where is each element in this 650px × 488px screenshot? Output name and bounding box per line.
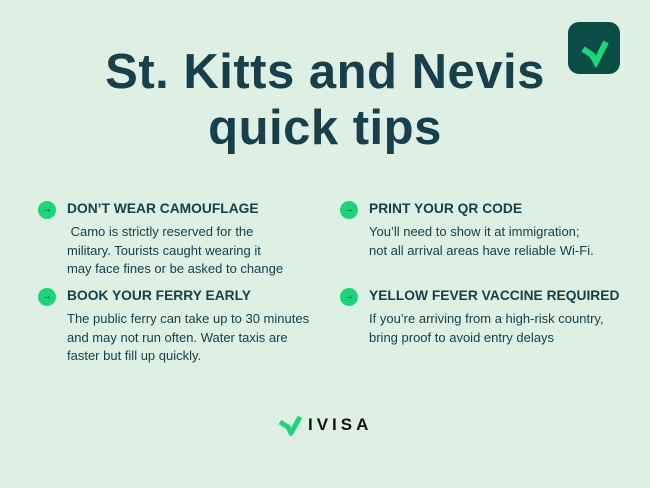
tip: yellow fever xyxy=(340,288,619,344)
tip: camouflage: → xyxy=(42,204,52,215)
tip: QR code xyxy=(340,201,594,258)
footer logo xyxy=(278,415,372,436)
tip: camouflage: DON’T WEAR CAMOUFLAGE xyxy=(67,201,259,216)
icon: logo badge xyxy=(568,22,620,74)
tip: ferry xyxy=(38,288,309,363)
title xyxy=(105,45,545,155)
tip: ferry: BOOK YOUR FERRY EARLY xyxy=(67,288,251,303)
tip: ferry: → xyxy=(42,291,52,302)
tip: camouflage: Camo is strictly reserved for the military. Tourists caught wearing it may face fines or be asked to change xyxy=(67,224,283,276)
title: quick tips xyxy=(208,101,442,155)
footer logo: IVISA xyxy=(308,415,372,434)
tip: QR code: → xyxy=(344,204,354,215)
tip: ferry: The public ferry can take up to 30 minutes and may not run often. Water taxis are faster but fill up quickly. xyxy=(67,311,309,363)
tip: yellow fever: YELLOW FEVER VACCINE REQUIRED xyxy=(369,288,619,303)
tip: yellow fever: If you’re arriving from a high-risk country, bring proof to avoid entry delays xyxy=(369,311,604,344)
tip: yellow fever: → xyxy=(344,291,354,302)
tip: camouflage xyxy=(38,201,283,276)
tip: QR code: PRINT YOUR QR CODE xyxy=(369,201,522,216)
title: St. Kitts and Nevis xyxy=(105,45,545,99)
tip: QR code: You’ll need to show it at immigration; not all arrival areas have reliable Wi-Fi. xyxy=(369,224,594,258)
